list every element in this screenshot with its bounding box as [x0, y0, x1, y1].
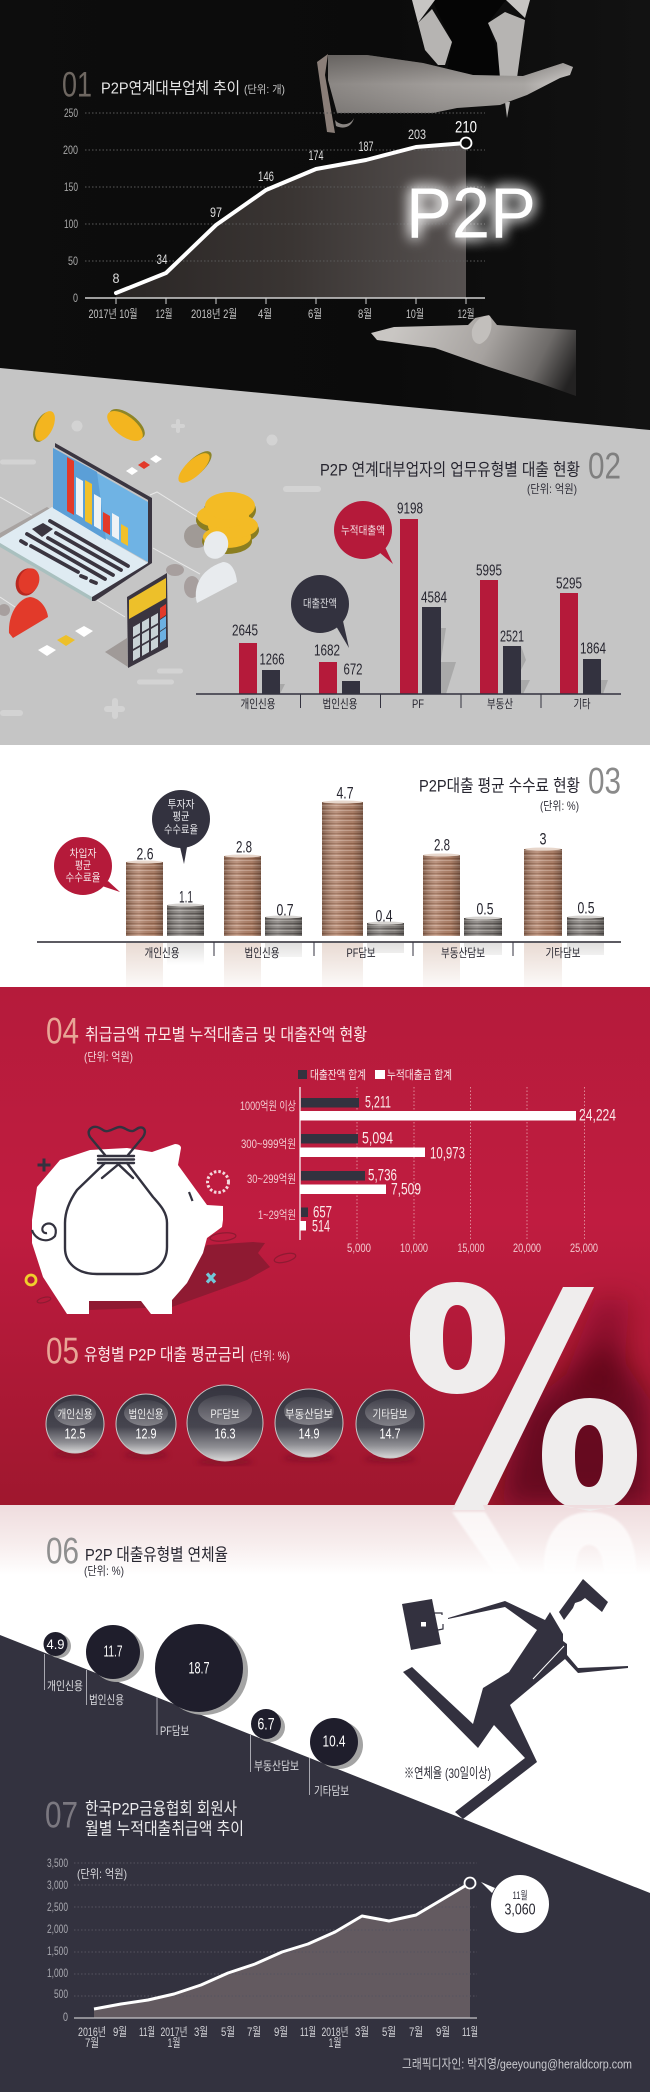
- dotted ring: [208, 1172, 228, 1192]
- ball: real estate collateral: [275, 1389, 343, 1457]
- bar values: [312, 1092, 616, 1236]
- stack reflections: [126, 943, 562, 987]
- category labels: 기타담보: [546, 946, 580, 960]
- small outline marks: [37, 1232, 297, 1304]
- category labels: 개인신용: [240, 697, 276, 711]
- chart 02: loan status by business type: [196, 446, 621, 711]
- heading 07: [45, 1794, 244, 1838]
- callout: borrower average fee: 차입자: [70, 847, 96, 860]
- heading 05: 유형별 P2P 대출 평균금리: [84, 1346, 245, 1364]
- illustration: running businessman: [402, 1579, 628, 1819]
- ball: personal credit: [46, 1395, 104, 1453]
- stack values: 2.6: [136, 844, 154, 864]
- money bag: [65, 1127, 167, 1274]
- row labels: 1000억원 이상: [240, 1099, 296, 1113]
- row labels: 300~999억원: [241, 1137, 296, 1151]
- heading 06: [46, 1530, 228, 1578]
- callout: cumulative loans: 누적대출액: [341, 524, 385, 537]
- data values: 187: [358, 138, 374, 154]
- ball: PF collateral: [187, 1385, 263, 1461]
- glowing P2P text: P2P: [406, 174, 536, 254]
- ball: personal credit: 12.5: [64, 1426, 86, 1442]
- calculator: [105, 638, 128, 667]
- y axis labels: 200: [63, 143, 78, 157]
- x axis labels: 2016년: [78, 2025, 106, 2039]
- category labels: 부동산담보: [441, 946, 485, 960]
- category labels: 법인신용: [322, 697, 358, 711]
- bar values: 5,211: [365, 1092, 391, 1112]
- axis labels: 5,000: [347, 1241, 371, 1255]
- heading 03: (단위: %): [540, 799, 579, 813]
- ball: other collateral: [356, 1390, 424, 1458]
- callout: cumulative loans: [334, 501, 393, 564]
- heading 02: (단위: 억원): [527, 482, 577, 496]
- x axis labels: 2017년 10월: [88, 307, 138, 321]
- data line: [116, 143, 466, 293]
- x axis labels: 7월: [409, 2025, 423, 2039]
- legend: 누적대출금 합계: [387, 1068, 452, 1082]
- category labels: 기타담보: [314, 1784, 349, 1798]
- stack values: 2.8: [434, 836, 450, 854]
- heading 02: 02: [588, 446, 621, 486]
- x axis labels: [88, 307, 474, 321]
- bar values: [232, 500, 606, 678]
- heading 05: [46, 1330, 290, 1372]
- chart 04: cumulative loans by size: [46, 1010, 616, 1255]
- bar values: 24,224: [579, 1106, 616, 1124]
- heading 01: P2P연계대부업체 추이: [101, 80, 240, 98]
- x axis labels: 2018년: [322, 2025, 348, 2039]
- x axis labels: 5월: [382, 2025, 396, 2039]
- data values: 8: [112, 270, 120, 286]
- y axis labels: 2,000: [47, 1922, 68, 1936]
- percent sign: [410, 1282, 637, 1511]
- bar values: 4584: [421, 590, 447, 606]
- x axis labels: 7월: [85, 2036, 99, 2050]
- bubble: corporate credit: [86, 1625, 140, 1679]
- x axis labels: 7월: [247, 2025, 261, 2039]
- callout: borrower average fee: [54, 837, 120, 895]
- x axis labels: 2017년: [160, 2025, 188, 2039]
- x axis labels: 9월: [436, 2025, 450, 2039]
- x axis labels: [78, 2025, 478, 2050]
- data values: [112, 118, 477, 286]
- heading 03: P2P대출 평균 수수료 현황: [419, 776, 580, 796]
- chart 06: delinquency rate: [44, 1530, 491, 1798]
- yellow ring: [26, 1275, 36, 1285]
- bubble: personal credit: [44, 1632, 68, 1656]
- white person: [166, 564, 184, 576]
- axis labels: 15,000: [458, 1241, 485, 1255]
- body and limbs: [403, 1601, 628, 1819]
- decoration marks: [0, 419, 321, 719]
- y axis labels: 100: [64, 217, 78, 231]
- illustration: lower hand: [371, 315, 576, 396]
- pig eye: [189, 1192, 192, 1201]
- ball: corporate credit: 12.9: [136, 1426, 156, 1442]
- stack values: 4.7: [336, 784, 354, 802]
- bars: [239, 519, 578, 694]
- section 1 background: [0, 0, 650, 460]
- callout: outstanding balance: 대출잔액: [303, 597, 337, 610]
- percent sign bottom overlap: [452, 1505, 620, 1511]
- y axis labels: 250: [64, 106, 78, 120]
- illustration: businessman shirt and tie: [412, 0, 530, 118]
- section 3 background: [0, 745, 650, 987]
- axis labels: 25,000: [570, 1241, 598, 1255]
- teal cross: [207, 1274, 215, 1282]
- y axis labels: 50: [68, 254, 78, 268]
- axis labels: 10,000: [400, 1241, 428, 1255]
- legend: 대출잔액 합계: [310, 1068, 366, 1082]
- category labels: 개인신용: [47, 1679, 83, 1693]
- x axis labels: 10월: [406, 307, 424, 321]
- illustration: upper hand: [317, 54, 573, 133]
- category labels: 개인신용: [144, 946, 180, 960]
- x axis labels: 8월: [358, 307, 372, 321]
- x axis labels: 12월: [458, 307, 474, 321]
- heading 05: (단위: %): [250, 1349, 290, 1363]
- area fill: [116, 143, 466, 298]
- y axis labels: 150: [64, 180, 78, 194]
- bubble: other collateral: 10.4: [322, 1734, 346, 1750]
- garment highlight: [533, 1646, 564, 1679]
- bubble leader lines: [44, 1654, 310, 1795]
- ball: other collateral: 14.7: [380, 1426, 400, 1442]
- coin stack: [184, 524, 210, 548]
- x axis labels: 3월: [194, 2025, 208, 2039]
- ball: corporate credit: 법인신용: [128, 1408, 164, 1421]
- ball: PF collateral: 16.3: [214, 1426, 236, 1442]
- bubble: other collateral: [310, 1718, 358, 1766]
- y axis labels: 3,500: [47, 1856, 68, 1870]
- illustration: piggy bank with money bag: [26, 1127, 297, 1314]
- category labels: PF담보: [346, 946, 376, 960]
- bar values: 672: [344, 662, 363, 678]
- unit note: (단위: 억원): [77, 1867, 127, 1881]
- x axis labels: 6월: [308, 307, 322, 321]
- briefcase: [402, 1599, 443, 1650]
- x axis labels: 11월: [300, 2025, 316, 2039]
- callout: investor average fee: 투자자: [168, 798, 194, 811]
- bar values: 1682: [314, 642, 340, 660]
- stack values: [136, 784, 594, 926]
- callout: outstanding balance: [291, 575, 349, 648]
- heading 03: [419, 760, 621, 813]
- ball: personal credit: 개인신용: [58, 1408, 92, 1421]
- heading 03: 03: [588, 760, 621, 802]
- callout: November value: 3,060: [504, 1902, 536, 1918]
- chart 05: average interest rate: [46, 1330, 424, 1465]
- ball: other collateral: 기타담보: [372, 1408, 408, 1421]
- data values: 34: [156, 251, 168, 267]
- chart 01: business count trend: [62, 66, 485, 321]
- y axis labels: 2,500: [47, 1900, 68, 1914]
- callout: investor average fee: [152, 790, 210, 864]
- shadow behind percent sign: [500, 1300, 650, 1505]
- category labels: PF담보: [160, 1724, 189, 1738]
- ball shadows: [53, 1451, 416, 1465]
- y axis labels: [63, 106, 78, 305]
- category labels: PF: [412, 697, 424, 711]
- stack values: 0.7: [276, 900, 294, 920]
- heading 07: 월별 누적대출취급액 추이: [85, 1820, 244, 1838]
- category labels: 부동산: [487, 697, 513, 711]
- category labels: 법인신용: [244, 946, 280, 960]
- bar values: 657: [313, 1202, 332, 1222]
- red person: [12, 565, 42, 599]
- plus mark: [38, 1158, 50, 1172]
- area fill: [94, 1883, 470, 2018]
- ball: PF collateral: PF담보: [210, 1408, 240, 1421]
- bar values: 5,736: [368, 1166, 397, 1184]
- laptop: [0, 507, 55, 540]
- heading 02: [320, 446, 621, 496]
- stack values: 0.5: [578, 898, 594, 918]
- callout: November value: 11월: [512, 1889, 528, 1902]
- bubble: PF collateral: 18.7: [188, 1658, 210, 1678]
- stack values: 2.8: [236, 838, 252, 856]
- y axis labels: 0: [63, 2010, 68, 2024]
- heading 07: 07: [45, 1794, 78, 1836]
- stack values: 1.1: [179, 888, 193, 906]
- row labels: [240, 1099, 296, 1222]
- bubble shadows: [47, 1627, 363, 1769]
- pig tail: [32, 1224, 56, 1240]
- stack values: 0.4: [376, 906, 392, 926]
- x axis labels: 5월: [221, 2025, 235, 2039]
- stack values: 0.5: [476, 900, 494, 918]
- data values: 97: [210, 204, 222, 220]
- y axis labels: 3,000: [47, 1878, 68, 1892]
- bar values: 514: [312, 1216, 330, 1236]
- callout: investor average fee: 평균: [172, 810, 190, 823]
- category labels: 법인신용: [89, 1693, 124, 1707]
- x axis labels: 1월: [328, 2036, 342, 2050]
- heading 07: 한국P2P금융협회 회원사: [85, 1800, 237, 1818]
- bar values: 5995: [476, 562, 502, 580]
- ball: corporate credit: [116, 1394, 176, 1454]
- heading 04: 취급금액 규모별 누적대출금 및 대출잔액 현황: [85, 1026, 367, 1044]
- heading 06: 06: [46, 1530, 79, 1572]
- chart 07: monthly cumulative loans: [45, 1794, 549, 2050]
- bar values: 5295: [556, 576, 582, 592]
- pig body: [32, 1144, 223, 1314]
- diamonds: [38, 455, 162, 656]
- coins: [29, 409, 57, 445]
- x axis labels: 3월: [355, 2025, 369, 2039]
- x axis labels: 4월: [258, 307, 272, 321]
- data line: [94, 1883, 470, 2009]
- bar values: 9198: [397, 500, 423, 518]
- row labels: 30~299억원: [247, 1172, 296, 1186]
- bubble: corporate credit: 11.7: [104, 1644, 123, 1660]
- bar values: 2645: [232, 622, 258, 640]
- bubble: PF collateral: [155, 1624, 243, 1712]
- category labels: 부동산담보: [254, 1759, 299, 1773]
- coin stacks: [126, 800, 604, 936]
- data values: 146: [258, 168, 274, 184]
- y axis labels: [47, 1856, 68, 2024]
- axis labels: 20,000: [513, 1241, 541, 1255]
- stack values: 3: [540, 830, 546, 848]
- ball: real estate collateral: 부동산담보: [285, 1408, 333, 1421]
- section 4-5 red background: [0, 987, 650, 1505]
- x axis labels: 9월: [274, 2025, 288, 2039]
- callout: November value: [481, 1875, 549, 1933]
- heading 04: (단위: 억원): [84, 1050, 133, 1064]
- row labels: 1~29억원: [258, 1208, 296, 1222]
- pig shadow: [89, 1242, 270, 1310]
- category labels: 기타: [574, 697, 590, 711]
- ball: real estate collateral: 14.9: [298, 1426, 320, 1442]
- heading 05: 05: [46, 1330, 79, 1372]
- section 2 background: [0, 368, 650, 745]
- bar values: 10,973: [430, 1144, 465, 1162]
- heading 01: 01: [62, 66, 92, 104]
- bar values: 7,509: [391, 1180, 421, 1198]
- bar values: 5,094: [362, 1128, 393, 1148]
- bubble: real estate collateral: 6.7: [258, 1714, 274, 1734]
- note: delinquency definition: ※연체율 (30일이상): [404, 1765, 491, 1781]
- heading 04: [46, 1010, 367, 1064]
- bar values: 1266: [260, 652, 285, 668]
- bubble: personal credit: 4.9: [46, 1636, 65, 1652]
- section 6-7 diagonal dark panel: [0, 1635, 650, 2092]
- y axis labels: 1,000: [47, 1966, 68, 1980]
- percent sign reflection: [452, 1512, 636, 1572]
- bar values: 2521: [500, 628, 524, 646]
- x axis labels: 9월: [113, 2025, 127, 2039]
- callout: borrower average fee: 수수료율: [66, 871, 100, 884]
- head: [559, 1579, 608, 1620]
- category labels: [240, 697, 590, 711]
- callout: borrower average fee: 평균: [75, 859, 91, 872]
- data values: 203: [408, 126, 426, 142]
- y axis labels: 1,500: [47, 1944, 68, 1958]
- bar shadows: [280, 628, 608, 694]
- data values: 210: [455, 118, 477, 136]
- callout: investor average fee: 수수료율: [164, 823, 198, 836]
- x axis labels: 2018년 2월: [191, 307, 237, 321]
- y axis labels: 0: [73, 291, 78, 305]
- category labels: [47, 1679, 349, 1798]
- horizontal bars: [301, 1098, 365, 1217]
- bar values: 1864: [580, 640, 606, 658]
- heading 02: P2P 연계대부업자의 업무유형별 대출 현황: [320, 460, 580, 480]
- network lines: [0, 492, 200, 617]
- chart 03: average fee rate: [37, 760, 621, 987]
- y axis labels: 500: [54, 1987, 68, 2001]
- illustration: laptop, coins and people: [0, 403, 321, 719]
- heading 01: (단위: 개): [244, 83, 285, 96]
- heading 04: 04: [46, 1010, 79, 1052]
- legend: [298, 1068, 452, 1082]
- x axis labels: 12월: [156, 307, 172, 321]
- x axis labels: 11월: [139, 2025, 155, 2039]
- category labels: [144, 946, 580, 960]
- data values: 174: [308, 147, 324, 163]
- heading 06: P2P 대출유형별 연체율: [85, 1546, 228, 1564]
- x axis labels: 1월: [168, 2036, 180, 2050]
- heading 06: (단위: %): [84, 1564, 124, 1578]
- bubble: real estate collateral: [251, 1709, 281, 1739]
- section 6 fade background: [0, 1505, 650, 1575]
- heading 01: [62, 66, 285, 104]
- axis labels: [347, 1241, 598, 1255]
- x axis labels: 11월: [462, 2025, 478, 2039]
